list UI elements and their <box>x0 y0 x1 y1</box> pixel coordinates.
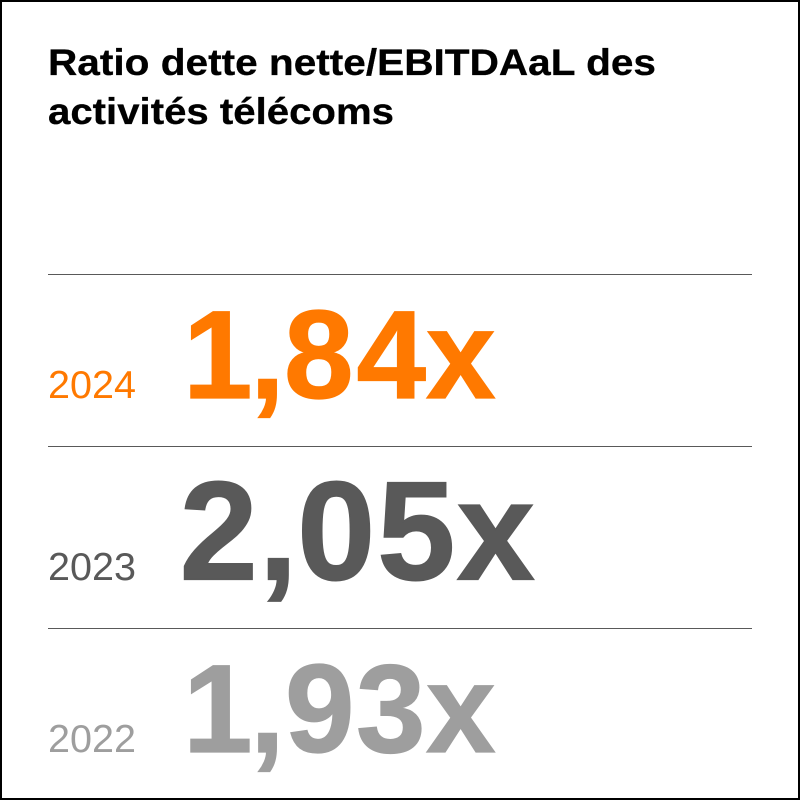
row: 2023: 2,05x <box>180 452 535 610</box>
row: 2023: 2023 <box>48 546 136 589</box>
row: 2022: 1,93x <box>183 640 496 779</box>
row: 2024 <box>48 286 496 425</box>
title <box>48 41 656 132</box>
title: Ratio dette nette/EBITDAaL des <box>48 41 656 83</box>
title: activités télécoms <box>48 90 394 132</box>
row: 2024: 1,84x <box>183 286 496 425</box>
row: 2022: 2022 <box>48 718 136 761</box>
row: 2022 <box>48 640 496 779</box>
row: 2024: 2024 <box>48 364 136 407</box>
